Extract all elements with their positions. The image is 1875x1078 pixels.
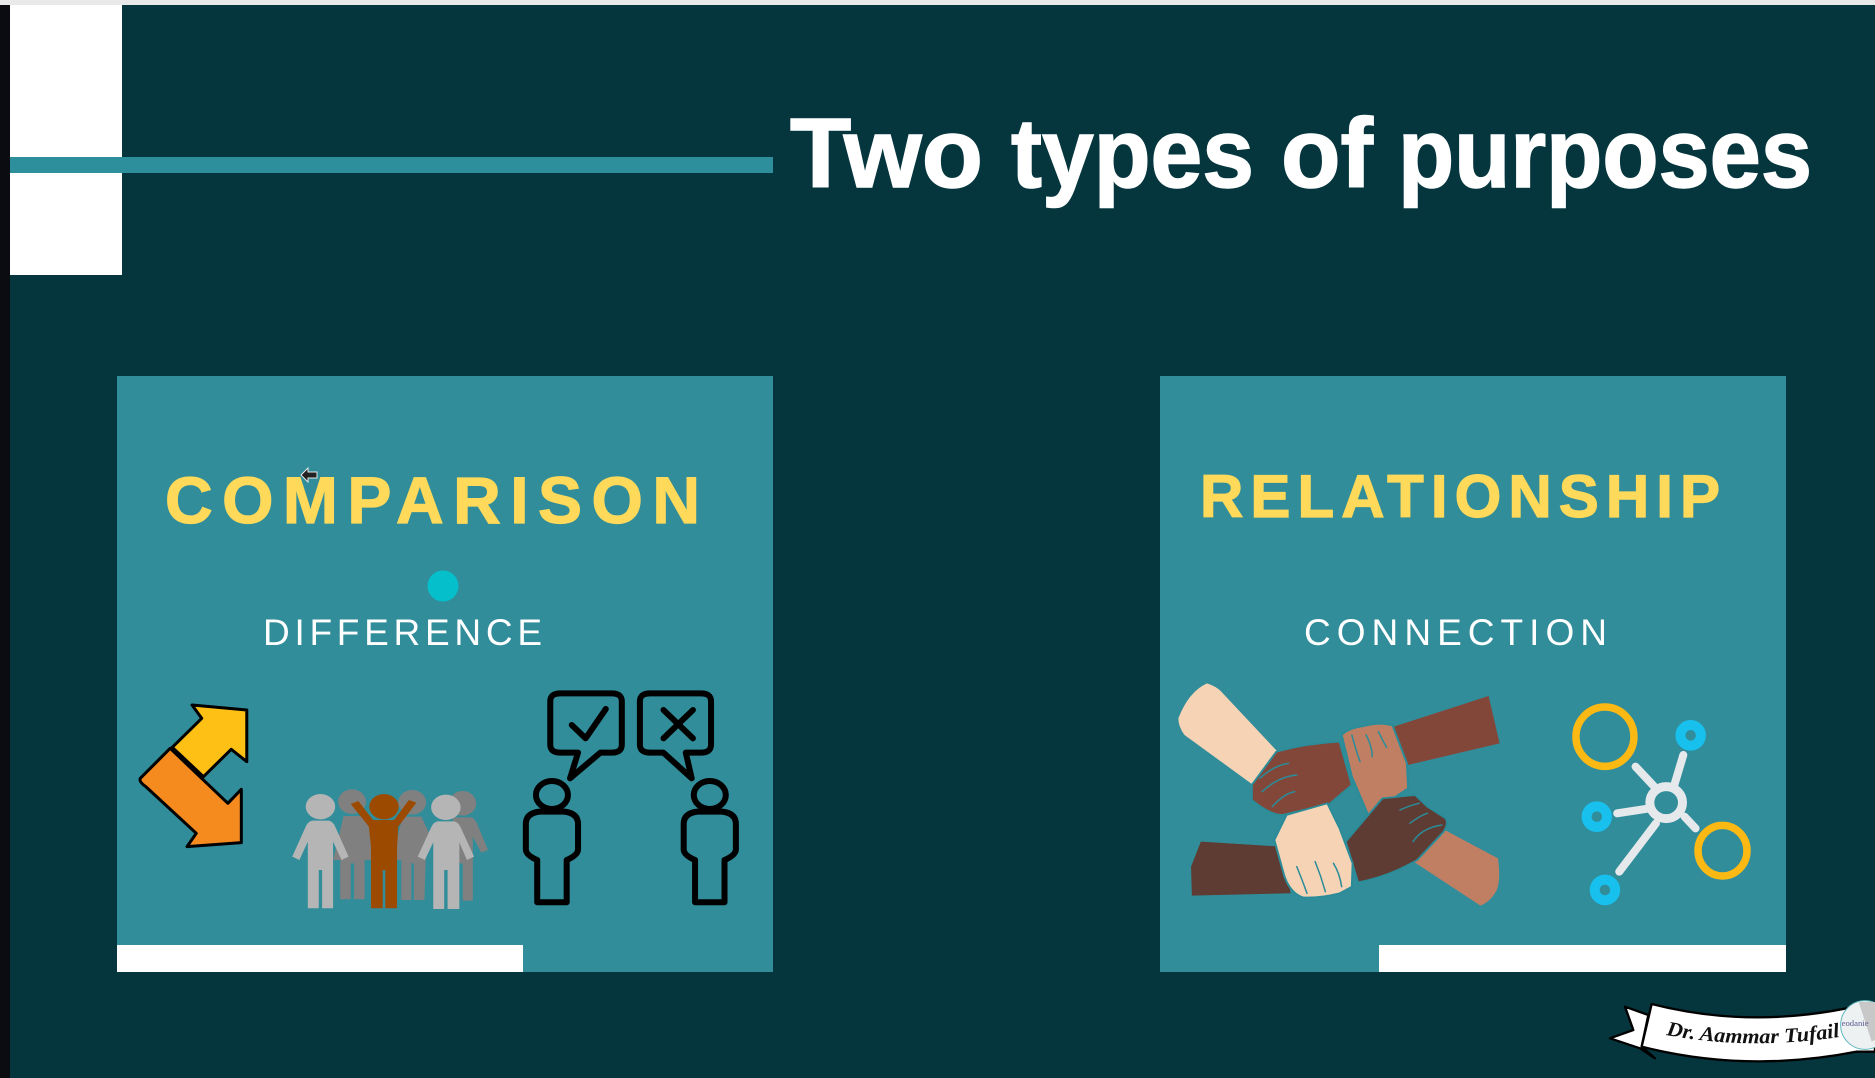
- heading: relationship: RELATIONSHIP: [1200, 463, 1720, 530]
- ribbon signature: [1608, 1000, 1875, 1062]
- icon: opposing arrows: [140, 705, 247, 847]
- panel: relationship: [1160, 376, 1786, 972]
- title: Two: [790, 98, 983, 208]
- icon: group of people: [292, 789, 488, 909]
- title: of: [1281, 98, 1373, 208]
- watermark badge: eodanie: [1842, 1018, 1869, 1028]
- panel accent bar: relationship: [1379, 945, 1786, 972]
- panel accent bar: comparison: [117, 945, 523, 972]
- icon: network nodes: [1576, 707, 1747, 900]
- icon: two people with agree and disagree speech bubbles: [526, 693, 736, 902]
- watermark badge: [1841, 1001, 1875, 1049]
- signature text: Dr. Aammar Tufail: [1666, 1022, 1839, 1045]
- subheading: difference: DIFFERENCE: [263, 612, 542, 653]
- white corner block: [10, 5, 122, 275]
- title: [790, 98, 1812, 208]
- panel: comparison: [117, 376, 773, 972]
- cursor dot: [428, 570, 458, 602]
- title: purposes: [1398, 98, 1812, 208]
- subheading: connection: CONNECTION: [1304, 612, 1607, 653]
- heading: comparison: COMPARISON: [165, 463, 700, 537]
- icon: interlocked hands: [1178, 683, 1500, 906]
- title rule: [10, 157, 773, 173]
- cursor arrow: [301, 468, 317, 482]
- title: types: [1011, 98, 1254, 208]
